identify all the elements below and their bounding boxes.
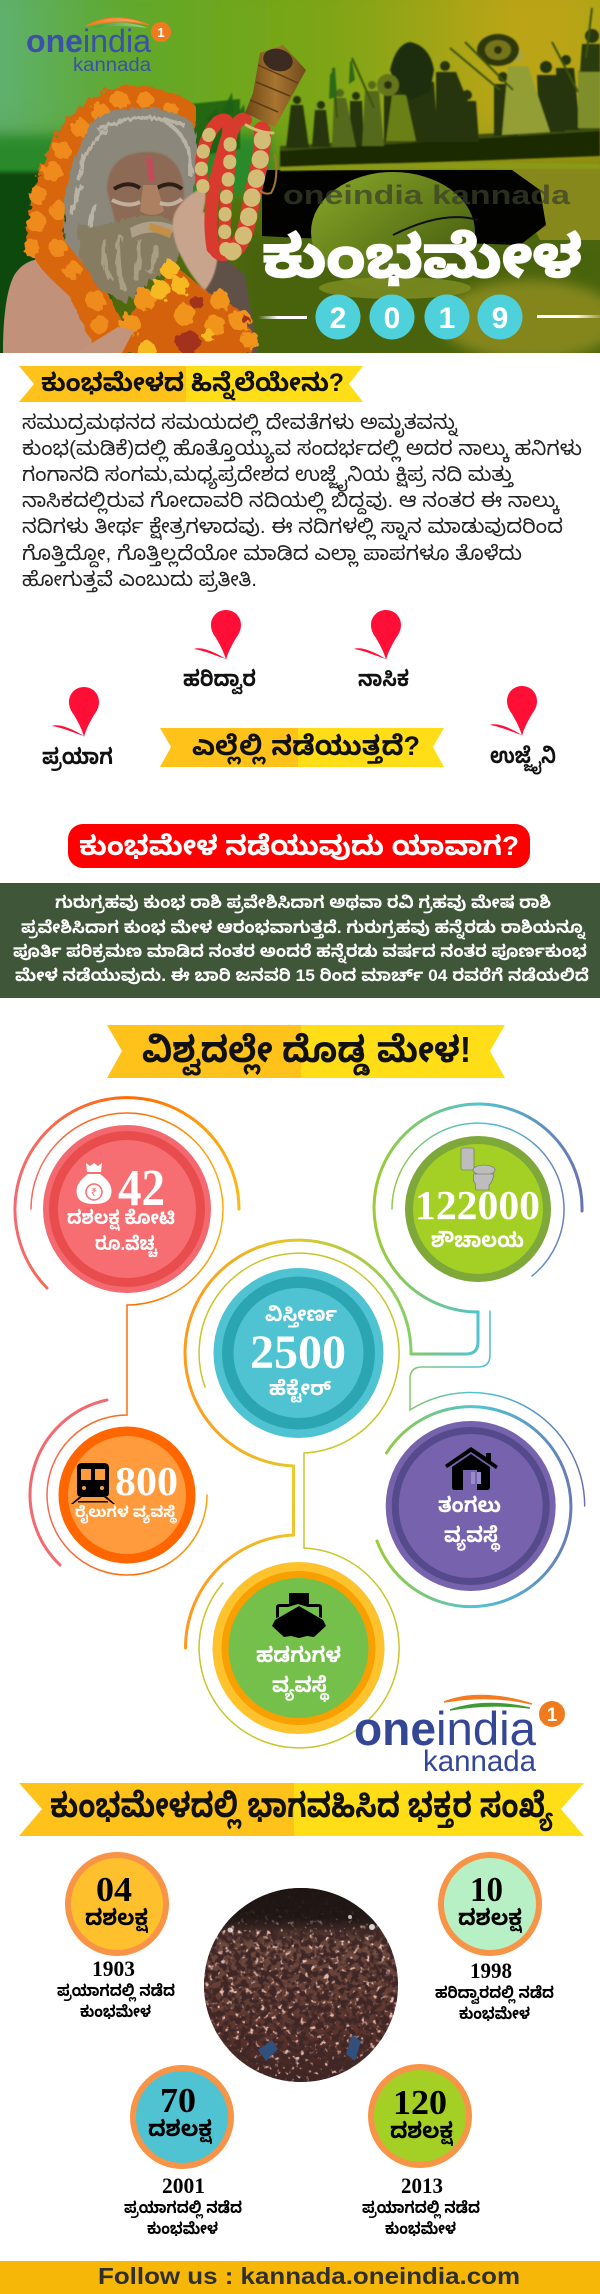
icon: house: [445, 1447, 498, 1490]
logo: oneindia kannada: one: [26, 23, 83, 59]
year badges 2019: 2: [330, 302, 346, 335]
text block: story: ಗಂಗಾನದಿ ಸಂಗಮ,ಮಧ್ಯಪ್ರದೇಶದ ಉಜ್ಜೈನಿಯ ಕ್ಷಿಪ್ರ ನದಿ ಮತ್ತು: [22, 464, 515, 492]
stat: 42 cost: ದಶಲಕ್ಷ ಕೋಟಿ: [67, 1208, 175, 1231]
marigold halo garland: [23, 91, 180, 335]
stat: 42 cost: [43, 1125, 211, 1293]
stat: boats: [212, 1562, 384, 1734]
location: Ujjain: ಉಜ್ಜೈನಿ: [490, 743, 556, 775]
procession silhouettes: [192, 7, 600, 172]
heading: where: [160, 728, 444, 767]
panel: when text: ಗುರುಗ್ರಹವು ಕುಂಭ ರಾಶಿ ಪ್ರವೇಶಿಸಿದಾಗ ಅಥವಾ ರವಿ ಗ್ರಹವು ಮೇಷ ರಾಶಿ: [55, 893, 551, 914]
logo: oneindia kannada: 1: [157, 25, 165, 40]
count: 1998: ದಶಲಕ್ಷ: [458, 1905, 522, 1934]
count: 2001: 70: [160, 2081, 196, 2120]
count: 2001: ಪ್ರಯಾಗದಲ್ಲಿ ನಡೆದ: [124, 2200, 242, 2219]
heading: background of Kumbh Mela: [19, 366, 363, 402]
count: 1903: ಪ್ರಯಾಗದಲ್ಲಿ ನಡೆದ: [57, 1983, 175, 2002]
count: 2013: 2013: [401, 2173, 443, 2198]
footer: Follow us : kannada.oneindia.com: [98, 2263, 520, 2289]
stat: 2500 hectare: 2500: [250, 1326, 346, 1379]
count: 1903: 04: [96, 1870, 132, 1909]
logo: oneindia kannada: india: [83, 23, 151, 59]
location: Nashik: [354, 610, 409, 691]
heading pill: when: [68, 824, 530, 868]
text block: story: ಕುಂಭ(ಮಡಿಕೆ)ದಲ್ಲಿ ಹೊತ್ತೊಯ್ಯುವ ಸಂದರ್ಭದಲ್ಲಿ ಅದರ ನಾಲ್ಕು ಹನಿಗಳು: [22, 438, 582, 464]
beard: [78, 216, 180, 303]
stat: 800 trains: [58, 1426, 196, 1564]
location: Nashik: ನಾಸಿಕ: [358, 666, 409, 691]
lower marigold garland: [118, 261, 259, 360]
logo: oneindia kannada large: kannada: [423, 1745, 536, 1778]
count: 2013: [362, 2067, 480, 2238]
logo: oneindia kannada large: [354, 1695, 565, 1778]
logo: oneindia kannada large: 1: [547, 1705, 558, 1726]
hero background: [0, 0, 600, 372]
logo: oneindia kannada: kannada: [73, 55, 151, 76]
shoulders and body: [3, 260, 92, 353]
count: 1998: 1998: [470, 1958, 512, 1983]
stat: accommodation: [386, 1421, 556, 1591]
count: 1998: ಕುಂಭಮೇಳ: [459, 2006, 530, 2023]
panel: when text: ಮೇಳ ನಡೆಯುವುದು. ಈ ಬಾರಿ ಜನವರಿ 15 ರಿಂದ ಮಾರ್ಚ್ 04 ರವರೆಗೆ ನಡೆಯಲಿದೆ: [15, 966, 589, 985]
heading: pilgrims count: [19, 1783, 584, 1836]
inflated pontoon dome: [311, 172, 478, 299]
heading: where: ಎಲ್ಲೆಲ್ಲಿ ನಡೆಯುತ್ತದೆ?: [192, 731, 420, 765]
count: 2013: ದಶಲಕ್ಷ: [390, 2118, 453, 2147]
stat: 800 trains: ರೈಲುಗಳ ವ್ಯವಸ್ಥೆ: [75, 1504, 177, 1524]
location: Prayag: ಪ್ರಯಾಗ: [42, 744, 113, 771]
count: 2001: ಕುಂಭಮೇಳ: [147, 2221, 218, 2238]
text block: story: ಗೊತ್ತಿದ್ದೋ, ಗೊತ್ತಿಲ್ಲದೆಯೋ ಮಾಡಿದ ಎಲ್ಲಾ ಪಾಪಗಳೂ ತೊಳೆದು: [22, 543, 522, 568]
stat: 800 trains: 800: [115, 1458, 178, 1504]
sadhu figure: [3, 45, 306, 360]
footer: [0, 2261, 600, 2294]
heading pill: when: ಕುಂಭಮೇಳ ನಡೆಯುವುದು ಯಾವಾಗ?: [79, 831, 519, 861]
panel: when text: [0, 883, 600, 998]
text block: story: ಹೋಗುತ್ತವೆ ಎಂಬುದು ಪ್ರತೀತಿ.: [22, 569, 257, 593]
stat: 122000 toilets: ಶೌಚಾಲಯ: [431, 1229, 524, 1252]
stat: 42 cost: ರೂ.ವೆಚ್ಚ: [95, 1234, 158, 1258]
count: 2013: ಕುಂಭಮೇಳ: [385, 2221, 456, 2238]
stat: 2500 hectare: ವಿಸ್ತೀರ್ಣ: [265, 1304, 337, 1328]
icon: toilet: [461, 1148, 495, 1190]
logo: oneindia kannada: [26, 18, 171, 76]
year badges 2019: 9: [492, 302, 508, 335]
stat: 122000 toilets: 122000: [415, 1182, 540, 1228]
panel: when text: ಪೂರ್ತಿ ಪರಿಕ್ರಮಣ ಮಾಡಿದ ನಂತರ ಅಂದರೆ ಹನ್ನೆರಡು ವರ್ಷದ ನಂತರ ಪೂರ್ಣಕುಂಭ: [13, 942, 587, 964]
text block: story: ನಾಸಿಕದಲ್ಲಿರುವ ಗೋದಾವರಿ ನದಿಯಲ್ಲಿ ಬಿದ್ದವು. ಆ ನಂತರ ಈ ನಾಲ್ಕು: [22, 490, 561, 515]
text block: story: [22, 412, 582, 593]
count: 1998: [435, 1855, 554, 2023]
stat: boats: ವ್ಯವಸ್ಥೆ: [272, 1674, 330, 1702]
cigar: [149, 223, 172, 238]
heading: world's biggest fair: ವಿಶ್ವದಲ್ಲೇ ದೊಡ್ಡ ಮೇಳ!: [142, 1029, 471, 1076]
icon: money bag: ₹: [91, 1187, 97, 1199]
count: 2013: ಪ್ರಯಾಗದಲ್ಲಿ ನಡೆದ: [362, 2200, 480, 2219]
face: [107, 152, 184, 232]
logo: oneindia kannada large: one: [354, 1702, 436, 1755]
count: 2001: ದಶಲಕ್ಷ: [148, 2116, 212, 2145]
count: 1903: ಕುಂಭಮೇಳ: [80, 2004, 151, 2021]
logo: oneindia kannada large: india: [436, 1702, 537, 1755]
panel: when text: ಪ್ರವೇಶಿಸಿದಾಗ ಕುಂಭ ಮೇಳ ಆರಂಭವಾಗುತ್ತದೆ. ಗುರುಗ್ರಹವು ಹನ್ನೆರಡು ರಾಶಿಯನ್ನೂ: [21, 918, 586, 940]
hand: [173, 187, 217, 290]
count: 2013: 120: [393, 2083, 447, 2122]
location: Ujjain: [490, 686, 556, 775]
connector rings: [15, 1098, 585, 1748]
count: 2001: [124, 2068, 242, 2238]
forearm: [92, 327, 134, 353]
stat: 2500 hectare: ಹೆಕ್ಟೇರ್: [269, 1378, 332, 1403]
count: 1998: ಹರಿದ್ವಾರದಲ್ಲಿ ನಡೆದ: [435, 1985, 554, 2005]
watermark: oneindia kannada: [283, 180, 571, 210]
stat: 42 cost: 42: [118, 1160, 165, 1217]
red coil rope: [201, 119, 276, 256]
photo: crowd: [200, 1885, 400, 2085]
text block: story: ನದಿಗಳು ತೀರ್ಥ ಕ್ಷೇತ್ರಗಳಾದವು. ಈ ನದಿಗಳಲ್ಲಿ ಸ್ನಾನ ಮಾಡುವುದರಿಂದ: [22, 516, 563, 541]
count: 1903: [57, 1855, 175, 2021]
count: 1903: 1903: [92, 1956, 135, 1981]
stat: 2500 hectare: [214, 1268, 384, 1438]
location: Haridwar: [183, 610, 256, 695]
icon: train: [71, 1463, 115, 1504]
location: Haridwar: ಹರಿದ್ವಾರ: [183, 666, 256, 695]
year badges 2019: 1: [439, 302, 455, 335]
panel: hero banner: [0, 0, 600, 372]
icon: money bag: [76, 1163, 112, 1204]
heading: world's biggest fair: [107, 1025, 505, 1078]
stat: accommodation: ತಂಗಲು: [438, 1494, 501, 1517]
stat: accommodation: ವ್ಯವಸ್ಥೆ: [444, 1524, 501, 1552]
count: 1998: 10: [470, 1870, 503, 1909]
year badges 2019: [258, 294, 600, 340]
stat: boats: ಹಡಗುಗಳ: [256, 1644, 341, 1667]
text block: story: ಸಮುದ್ರಮಥನದ ಸಮಯದಲ್ಲಿ ದೇವತೆಗಳು ಅಮೃತವನ್ನು: [22, 412, 459, 438]
stat: 122000 toilets: [405, 1136, 551, 1282]
count: 2001: 2001: [162, 2173, 205, 2198]
heading: background of Kumbh Mela: ಕುಂಭಮೇಳದ ಹಿನ್ನೆಲೆಯೇನು?: [41, 369, 344, 401]
horn: [245, 45, 306, 127]
count: 1903: ದಶಲಕ್ಷ: [85, 1905, 148, 1934]
title: ಕುಂಭಮೇಳ: [262, 225, 582, 290]
icon: boat: [272, 1593, 326, 1638]
location: Prayag: [42, 687, 113, 771]
hair: [64, 107, 197, 285]
year badges 2019: 0: [384, 302, 400, 335]
